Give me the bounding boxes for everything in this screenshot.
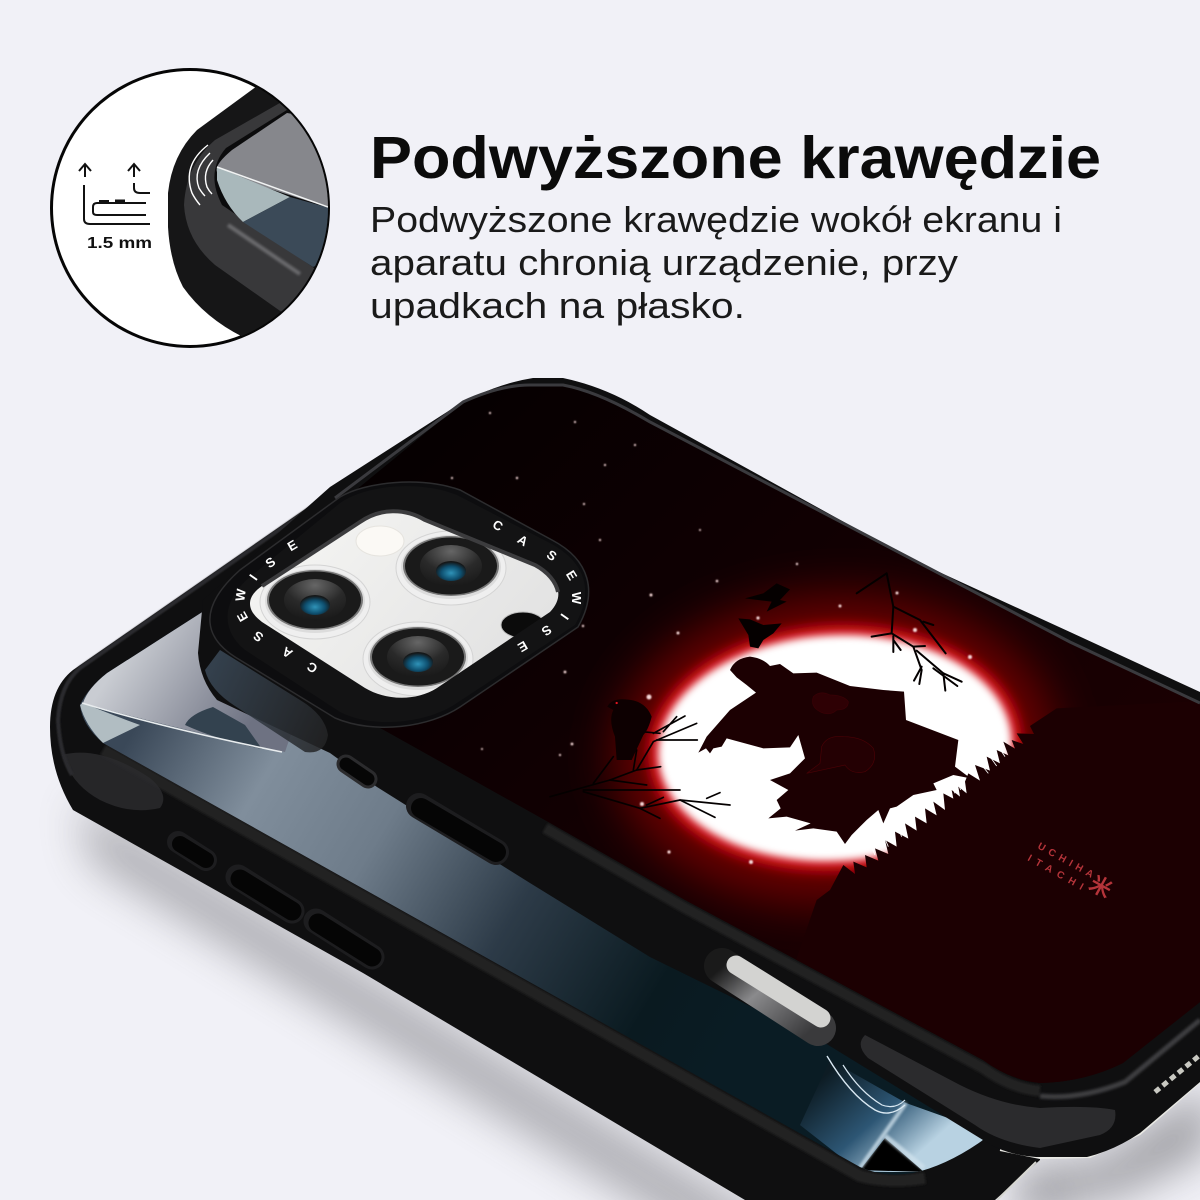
body text: Podwyższone krawędzie wokół ekranu i: [370, 199, 1062, 240]
top phone rim band: [545, 828, 1040, 1091]
ring brand lettering: C: [304, 658, 320, 676]
camera plate: [248, 509, 560, 700]
lens left: [260, 565, 370, 639]
ring brand lettering: I: [246, 572, 261, 583]
cloud emblem upper: [812, 693, 848, 714]
label: 1.5 mm: 1.5 mm: [87, 235, 152, 252]
signature text: UCHIHA: [1036, 841, 1095, 881]
ring inner wall: [262, 511, 558, 592]
moon glow: [607, 585, 1063, 915]
shadow under phones: [80, 800, 1060, 1200]
ring brand lettering: S: [250, 628, 266, 645]
signature text: [1028, 842, 1113, 898]
back phone button: action: [178, 842, 206, 860]
ring brand lettering: I: [557, 611, 572, 622]
back phone rim highlight: [58, 484, 345, 775]
back phone button: volume up: [238, 877, 292, 911]
ring brand lettering: C: [490, 517, 506, 535]
flying crow top: [745, 583, 790, 612]
ring brand lettering: S: [539, 622, 555, 639]
back phone screen: [80, 612, 983, 1174]
top phone art edge highlight: [335, 385, 1200, 703]
top phone button: mute switch: [346, 764, 368, 779]
back phone lower right edge: [997, 1082, 1200, 1200]
shadow lower right: [1020, 1085, 1200, 1200]
back phone case body: [50, 478, 1040, 1200]
camera outer bezel: [210, 482, 589, 727]
lens bottom: [363, 622, 473, 696]
ring brand lettering: [232, 517, 584, 676]
camera lens ring: [228, 486, 585, 722]
ring brand lettering: E: [515, 638, 530, 655]
cloud emblem lower: [807, 736, 875, 773]
flash: [356, 526, 404, 556]
ring brand lettering: S: [262, 554, 278, 571]
back phone corner bumper: [62, 753, 163, 810]
back phone button: volume down: [316, 921, 372, 957]
ring brand lettering: A: [279, 643, 295, 661]
signature text: ITACHI: [1026, 853, 1085, 893]
ring brand lettering: E: [563, 568, 580, 583]
case corner close-up: [168, 87, 328, 336]
signature text: 米: [1086, 872, 1116, 903]
body text: upadkach na płasko.: [370, 285, 745, 326]
grass and ground: [808, 708, 1078, 928]
speaker grille: [1155, 1055, 1200, 1092]
ring brand lettering: A: [515, 532, 531, 550]
ring brand lettering: S: [544, 547, 560, 564]
upper right tree branch: [857, 573, 962, 691]
ring brand lettering: W: [569, 592, 584, 605]
top phone button: power: [419, 806, 496, 852]
charging port: [722, 965, 821, 1028]
top phone left bumper: [205, 650, 328, 752]
ring brand lettering: E: [285, 537, 300, 554]
back phone rim band: [103, 750, 925, 1181]
silhouette figure: [698, 657, 971, 844]
top phone lower corner bumper: [861, 1035, 1115, 1148]
lens right: [396, 531, 506, 605]
lower edge highlight: [1040, 1020, 1200, 1097]
stars: [451, 412, 972, 864]
grass highlights: [870, 747, 1005, 855]
top phone art panel: [359, 386, 1200, 1083]
panel: raised edge inset circle: [52, 70, 340, 346]
camera module: [210, 482, 589, 727]
camera hole: [501, 612, 545, 638]
flying crow lower: [738, 618, 782, 648]
body text: [370, 199, 1062, 326]
pressure arcs icon: [189, 145, 213, 205]
lower left tree branch: [550, 716, 730, 818]
moon: [652, 626, 1018, 870]
title: Podwyższone krawędzie: [370, 125, 1101, 191]
crow on branch: [607, 699, 652, 760]
teal wallpaper wedge: [800, 1056, 990, 1172]
body text: aparatu chronią urządzenie, przy: [370, 242, 958, 283]
top phone case body: [198, 378, 1200, 1157]
ring brand lettering: E: [234, 609, 251, 624]
ring brand lettering: W: [232, 587, 249, 602]
icon: raised edge diagram: [79, 164, 150, 224]
